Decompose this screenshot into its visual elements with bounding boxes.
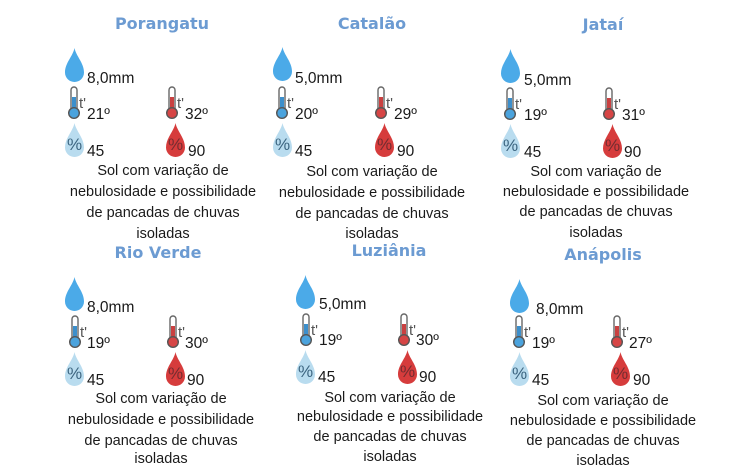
heading: Jataí: Jataí xyxy=(582,15,625,34)
minimum temperature: 20º xyxy=(295,106,318,123)
icon: maximum temperature thermometer xyxy=(167,87,184,118)
minimum humidity: 45 xyxy=(532,372,549,389)
icon: minimum temperature thermometer xyxy=(277,87,294,118)
rainfall value: 8,0mm xyxy=(87,299,134,316)
minimum humidity: 45 xyxy=(295,143,312,160)
forecast description: de pancadas de chuvas xyxy=(526,433,680,449)
maximum humidity: 90 xyxy=(419,369,437,386)
icon: rain drop xyxy=(273,47,292,81)
forecast description: de pancadas de chuvas xyxy=(86,205,240,221)
icon: maximum humidity drop: % xyxy=(168,135,183,154)
icon: maximum humidity drop xyxy=(166,123,185,157)
icon: maximum temperature thermometer: t' xyxy=(622,324,629,341)
rainfall value: 5,0mm xyxy=(319,296,366,313)
forecast description: Sol com variação de xyxy=(306,164,438,180)
panel: Anápolis xyxy=(510,245,696,466)
panel: Catalão xyxy=(273,14,465,242)
icon: maximum humidity drop xyxy=(375,123,394,157)
forecast description: isoladas xyxy=(569,225,623,241)
icon: minimum humidity drop: % xyxy=(512,364,527,383)
icon: maximum humidity drop: % xyxy=(605,136,620,155)
icon: maximum temperature thermometer: t' xyxy=(409,322,416,339)
icon: rain drop xyxy=(501,49,520,83)
forecast description: isoladas xyxy=(136,226,190,242)
forecast description: isoladas xyxy=(363,449,417,465)
forecast description: Sol com variação de xyxy=(97,163,229,179)
icon: minimum humidity drop: % xyxy=(67,364,82,383)
icon: minimum temperature thermometer xyxy=(70,316,87,347)
icon: maximum humidity drop: % xyxy=(168,364,183,383)
rainfall value: 5,0mm xyxy=(524,72,571,89)
maximum temperature: 27º xyxy=(629,335,652,352)
icon: minimum temperature thermometer xyxy=(69,87,86,118)
icon: maximum humidity drop: % xyxy=(400,362,415,381)
maximum temperature: 32º xyxy=(185,106,208,123)
icon: maximum humidity drop: % xyxy=(377,135,392,154)
forecast description: nebulosidade e possibilidade xyxy=(503,184,689,200)
forecast description: Sol com variação de xyxy=(95,391,227,407)
heading: Luziânia: Luziânia xyxy=(352,241,426,260)
minimum temperature: 19º xyxy=(87,335,110,352)
forecast description: Sol com variação de xyxy=(324,390,456,406)
minimum temperature: 19º xyxy=(319,332,342,349)
icon: minimum humidity drop xyxy=(65,123,84,157)
icon: minimum humidity drop xyxy=(65,352,84,386)
forecast description: de pancadas de chuvas xyxy=(84,433,238,449)
icon: rain drop xyxy=(510,279,529,313)
icon: maximum temperature thermometer: t' xyxy=(386,95,393,112)
icon: minimum humidity drop: % xyxy=(503,136,518,155)
forecast description: Sol com variação de xyxy=(530,164,662,180)
forecast description: nebulosidade e possibilidade xyxy=(68,412,254,428)
icon: maximum temperature thermometer xyxy=(376,87,393,118)
maximum humidity: 90 xyxy=(624,144,642,161)
heading: Porangatu: Porangatu xyxy=(115,14,209,33)
icon: minimum humidity drop xyxy=(296,350,315,384)
maximum temperature: 30º xyxy=(416,332,439,349)
panel: Porangatu xyxy=(65,14,256,242)
icon: minimum humidity drop xyxy=(501,124,520,158)
icon: maximum temperature thermometer xyxy=(612,316,629,347)
icon: maximum temperature thermometer xyxy=(399,314,416,345)
forecast description: nebulosidade e possibilidade xyxy=(279,185,465,201)
minimum humidity: 45 xyxy=(87,143,104,160)
rainfall value: 8,0mm xyxy=(87,70,134,87)
icon: minimum humidity drop xyxy=(273,123,292,157)
panel: Luziânia xyxy=(296,241,483,465)
forecast description: de pancadas de chuvas xyxy=(295,206,449,222)
minimum humidity: 45 xyxy=(524,144,541,161)
rainfall value: 5,0mm xyxy=(295,70,342,87)
minimum temperature: 21º xyxy=(87,106,110,123)
panel: Jataí xyxy=(501,15,689,241)
icon: maximum temperature thermometer: t' xyxy=(177,95,184,112)
icon: minimum temperature thermometer xyxy=(514,316,531,347)
icon: rain drop xyxy=(65,277,84,311)
rainfall value: 8,0mm xyxy=(536,301,583,318)
forecast description: Sol com variação de xyxy=(537,393,669,409)
forecast description: isoladas xyxy=(345,226,399,242)
icon: minimum temperature thermometer xyxy=(505,88,522,119)
icon: minimum temperature thermometer: t' xyxy=(515,96,522,113)
icon: minimum temperature thermometer: t' xyxy=(287,95,294,112)
heading: Catalão: Catalão xyxy=(338,14,406,33)
minimum humidity: 45 xyxy=(318,369,335,386)
icon: maximum temperature thermometer xyxy=(604,88,621,119)
icon: minimum temperature thermometer: t' xyxy=(524,324,531,341)
minimum temperature: 19º xyxy=(532,335,555,352)
heading: Rio Verde: Rio Verde xyxy=(115,243,202,262)
icon: maximum temperature thermometer xyxy=(168,316,185,347)
forecast description: de pancadas de chuvas xyxy=(313,429,467,445)
icon: maximum humidity drop xyxy=(611,352,630,386)
maximum temperature: 29º xyxy=(394,106,417,123)
icon: rain drop xyxy=(65,48,84,82)
maximum humidity: 90 xyxy=(633,372,651,389)
maximum temperature: 31º xyxy=(622,107,645,124)
icon: maximum humidity drop: % xyxy=(613,364,628,383)
icon: maximum humidity drop xyxy=(166,352,185,386)
forecast description: nebulosidade e possibilidade xyxy=(510,413,696,429)
maximum humidity: 90 xyxy=(187,372,205,389)
icon: maximum temperature thermometer: t' xyxy=(614,96,621,113)
icon: minimum humidity drop: % xyxy=(67,135,82,154)
forecast description: nebulosidade e possibilidade xyxy=(297,409,483,425)
icon: minimum temperature thermometer: t' xyxy=(311,322,318,339)
forecast description: nebulosidade e possibilidade xyxy=(70,184,256,200)
icon: minimum temperature thermometer xyxy=(301,314,318,345)
icon: maximum humidity drop xyxy=(398,350,417,384)
icon: minimum temperature thermometer: t' xyxy=(80,324,87,341)
maximum humidity: 90 xyxy=(397,143,415,160)
minimum humidity: 45 xyxy=(87,372,104,389)
icon: maximum temperature thermometer: t' xyxy=(178,324,185,341)
icon: minimum humidity drop: % xyxy=(298,362,313,381)
icon: minimum temperature thermometer: t' xyxy=(79,95,86,112)
icon: rain drop xyxy=(296,275,315,309)
minimum temperature: 19º xyxy=(524,107,547,124)
maximum humidity: 90 xyxy=(188,143,206,160)
heading: Anápolis: Anápolis xyxy=(564,245,642,264)
maximum temperature: 30º xyxy=(185,335,208,352)
forecast description: de pancadas de chuvas xyxy=(519,204,673,220)
icon: minimum humidity drop xyxy=(510,352,529,386)
icon: minimum humidity drop: % xyxy=(275,135,290,154)
icon: maximum humidity drop xyxy=(603,124,622,158)
panel: Rio Verde xyxy=(65,243,254,466)
